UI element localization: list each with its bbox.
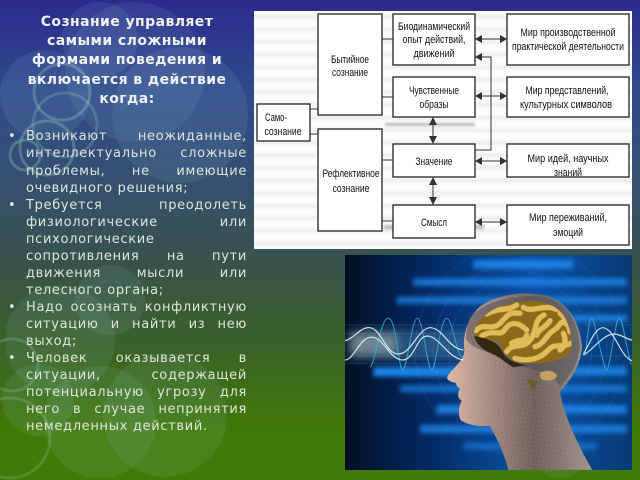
title: когда: <box>99 91 155 107</box>
diagram labels: Бытийное <box>331 54 369 66</box>
bullet list: • <box>8 129 16 144</box>
bullet list: проблемы, не имеющие <box>26 164 247 179</box>
box: Значение <box>393 144 475 177</box>
diagram labels: опыт действий, <box>402 34 466 46</box>
brain <box>473 301 572 391</box>
box: Мир идей <box>507 144 629 177</box>
title: Сознание управляет <box>41 14 213 30</box>
bullet list: сопротивления на пути <box>26 249 247 264</box>
bullet list: немедленных действий. <box>26 419 208 434</box>
diagram labels: Рефлективное <box>322 168 380 180</box>
diagram panel <box>254 11 632 249</box>
bullet list: выход; <box>26 334 77 349</box>
box: Самосознание <box>257 104 310 141</box>
diagram labels: Само- <box>265 112 287 124</box>
bullet list: ситуации, содержащей <box>26 368 247 383</box>
bullet list: Возникают неожиданные, <box>26 129 247 144</box>
bullet list: • <box>8 198 16 213</box>
diagram labels: Мир идей, научных <box>528 153 609 165</box>
diagram labels: Смысл <box>421 217 447 229</box>
bullet list: Требуется преодолеть <box>26 198 247 213</box>
title: включается в действие <box>28 72 226 88</box>
box: Смысл <box>393 205 475 238</box>
diagram labels: знаний <box>554 167 582 179</box>
diagram labels <box>264 21 624 239</box>
bullet list: него в случае непринятия <box>26 402 247 417</box>
bullet list: очевидного решения; <box>26 181 188 196</box>
bullet list: ситуацию и найти из нею <box>26 317 247 332</box>
diagram labels: сознание <box>332 67 368 79</box>
light bands <box>373 260 627 449</box>
box: Чувственные образы <box>393 77 475 117</box>
title: самыми сложными <box>47 33 207 49</box>
title: формами поведения и <box>32 52 222 68</box>
diagram labels: Мир переживаний, <box>529 212 607 224</box>
diagram labels: Значение <box>416 156 452 168</box>
title <box>28 14 226 107</box>
bullet list: психологические <box>26 232 155 247</box>
bright white waves <box>345 328 632 361</box>
diagram labels: сознание <box>332 183 370 195</box>
diagram labels: сознание <box>264 126 302 138</box>
diagram labels: образы <box>420 99 449 111</box>
bullet list <box>8 129 247 434</box>
illustration: head with brain and waves <box>345 255 632 470</box>
connector lines <box>310 39 502 222</box>
bullet list: Человек оказывается в <box>26 351 247 366</box>
bullet list: потенциальную угрозу для <box>26 385 247 400</box>
box: Бытийное сознание <box>318 14 382 115</box>
thin blue waves <box>370 318 632 370</box>
faint rings <box>415 245 625 455</box>
arrowheads <box>429 35 507 226</box>
bullet list: Надо осознать конфликтную <box>26 300 247 315</box>
head silhouette <box>447 293 592 470</box>
bullet list: движения мысли или <box>26 266 247 281</box>
bullet list: физиологические или <box>26 215 247 230</box>
bullet list: телесного органа; <box>26 283 164 298</box>
box: Мир представлений <box>507 77 629 117</box>
box: Мир переживаний <box>507 205 629 245</box>
bullet list: • <box>8 351 16 366</box>
glow behind waves <box>350 330 477 359</box>
bullet list: • <box>8 300 16 315</box>
box: Биодинамический опыт <box>393 14 475 65</box>
diagram labels: движений <box>414 48 454 60</box>
diagram labels: Чувственные <box>409 85 459 97</box>
box: Рефлективное сознание <box>318 129 382 231</box>
bullet list: интеллектуально сложные <box>26 146 247 161</box>
diagram labels: эмоций <box>553 227 583 239</box>
diagram labels: Биодинамический <box>398 21 470 33</box>
diagram labels: Мир представлений, <box>526 85 608 97</box>
box: Мир производственной <box>507 14 629 65</box>
diagram labels: культурных символов <box>520 99 612 111</box>
